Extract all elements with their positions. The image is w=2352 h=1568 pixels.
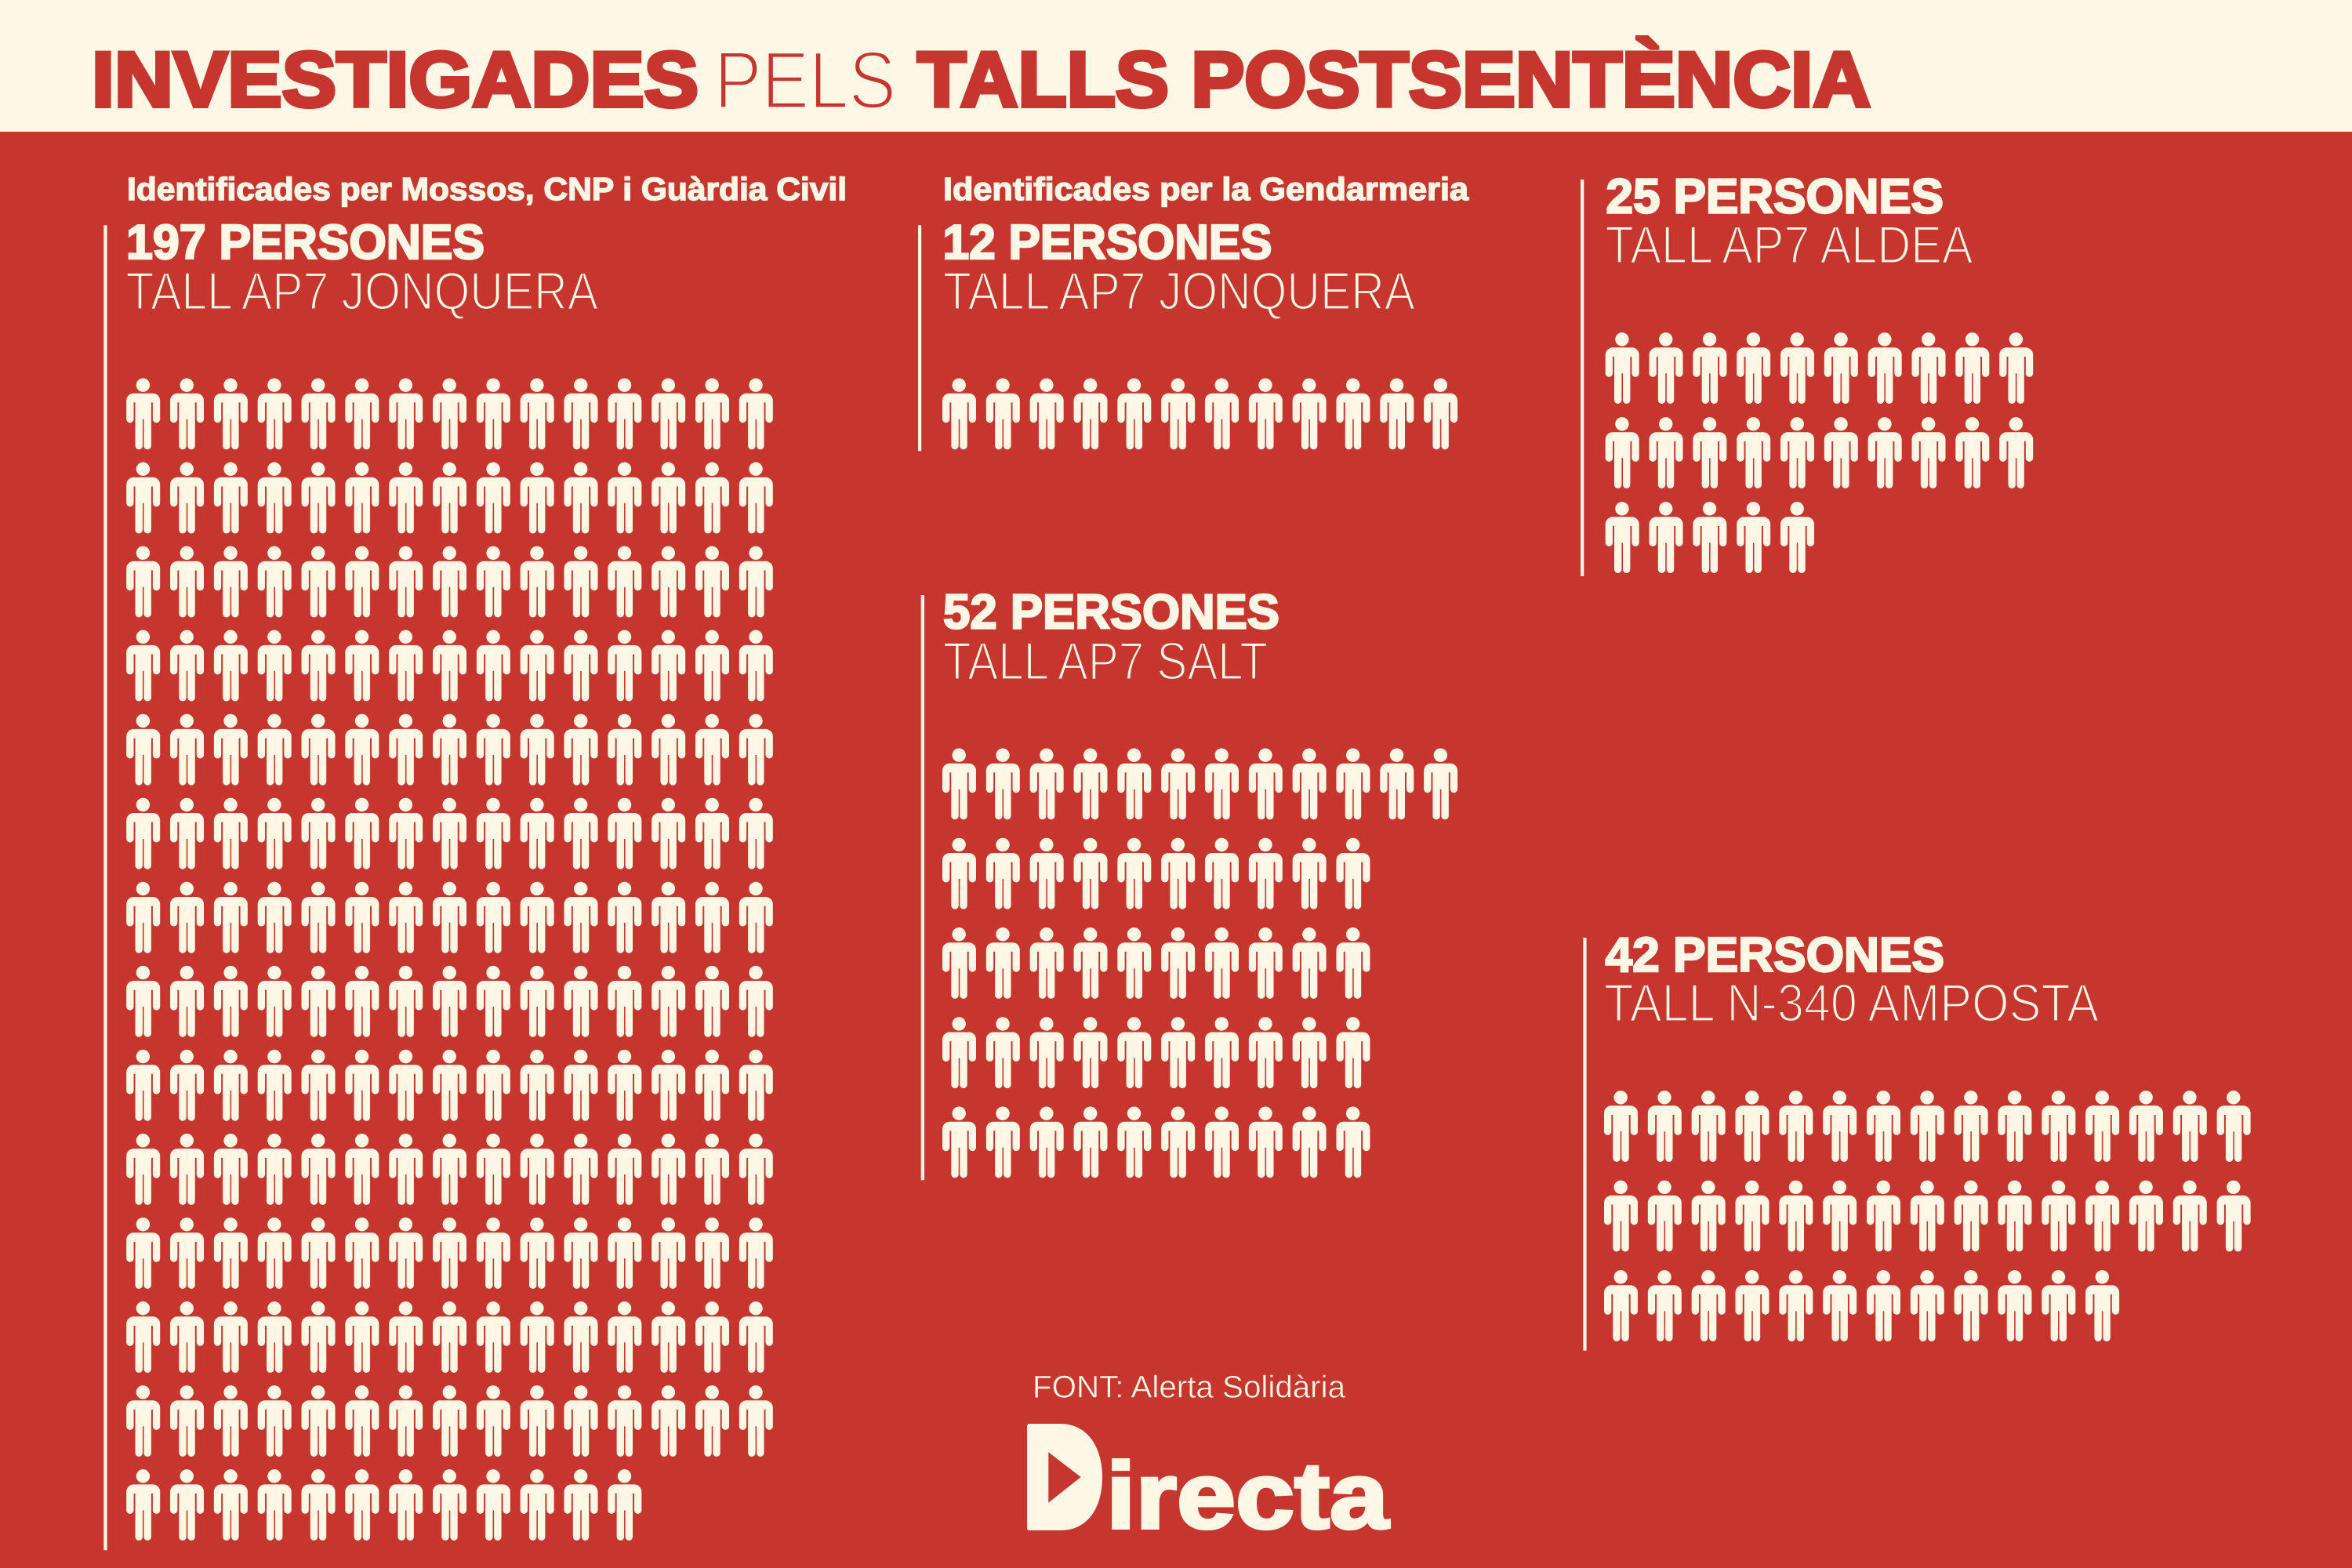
source note: FONT: Alerta Solidària bbox=[1033, 1370, 1346, 1404]
pictogram grid bbox=[942, 378, 1457, 449]
panel: 12 persones AP7 Jonquera bbox=[918, 216, 1457, 451]
panel: 197 persones AP7 Jonquera bbox=[103, 216, 773, 1550]
pictogram grid bbox=[1604, 1091, 2251, 1341]
logo: Directa: irecta bbox=[1106, 1443, 1389, 1548]
location label: TALL AP7 JONQUERA bbox=[943, 262, 1415, 321]
count heading: 42 PERSONES bbox=[1606, 928, 1944, 982]
logo: Directa: D bbox=[1021, 1396, 1099, 1561]
count heading: 12 PERSONES bbox=[942, 216, 1272, 270]
count heading: 197 PERSONES bbox=[126, 216, 485, 270]
panel: 25 persones AP7 Aldea bbox=[1581, 169, 2033, 576]
header band bbox=[0, 0, 2352, 132]
title: PELS bbox=[714, 35, 896, 126]
location label: TALL AP7 ALDEA bbox=[1606, 216, 1973, 274]
pictogram grid bbox=[1606, 332, 2033, 573]
title: INVESTIGADES bbox=[92, 36, 699, 122]
title bbox=[92, 35, 1871, 126]
pictogram grid bbox=[126, 378, 773, 1541]
title: TALLS POSTSENTÈNCIA bbox=[917, 36, 1871, 122]
logo: Directa bbox=[1021, 1396, 1389, 1561]
location label: TALL AP7 SALT bbox=[943, 632, 1268, 691]
location label: TALL N-340 AMPOSTA bbox=[1604, 974, 2099, 1033]
count heading: 52 PERSONES bbox=[943, 585, 1279, 640]
subheading: Mossos, CNP, Guàrdia Civil: Identificades per Mossos, CNP i Guàrdia Civil bbox=[127, 171, 847, 207]
location label: TALL AP7 JONQUERA bbox=[125, 262, 598, 321]
pictogram grid bbox=[942, 748, 1457, 1178]
panel: 42 persones N-340 Amposta bbox=[1583, 928, 2251, 1351]
panel: 52 persones AP7 Salt bbox=[921, 585, 1457, 1180]
count heading: 25 PERSONES bbox=[1606, 169, 1944, 224]
subheading: Gendarmeria: Identificades per la Gendarmeria bbox=[943, 171, 1469, 207]
